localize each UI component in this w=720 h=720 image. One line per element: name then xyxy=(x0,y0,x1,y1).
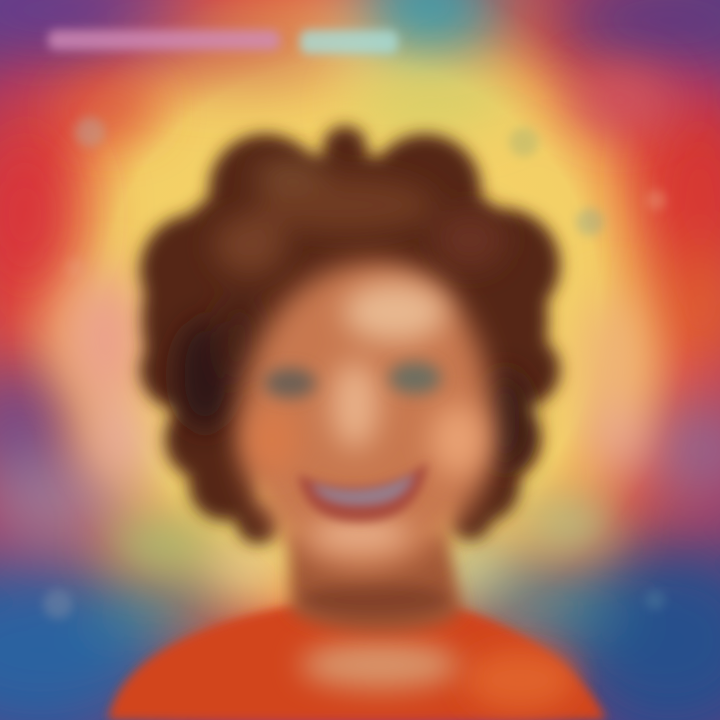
curly hair xyxy=(140,126,560,544)
smiling face xyxy=(240,262,494,572)
floating sparkles xyxy=(43,117,666,619)
shirt xyxy=(108,606,606,720)
chest and collar xyxy=(300,641,460,689)
child neck xyxy=(290,530,462,632)
cheeks and forehead highlights xyxy=(246,282,486,553)
smile xyxy=(298,462,428,522)
right eye xyxy=(389,362,441,394)
left eye xyxy=(264,368,316,398)
blurred title text xyxy=(48,30,398,54)
